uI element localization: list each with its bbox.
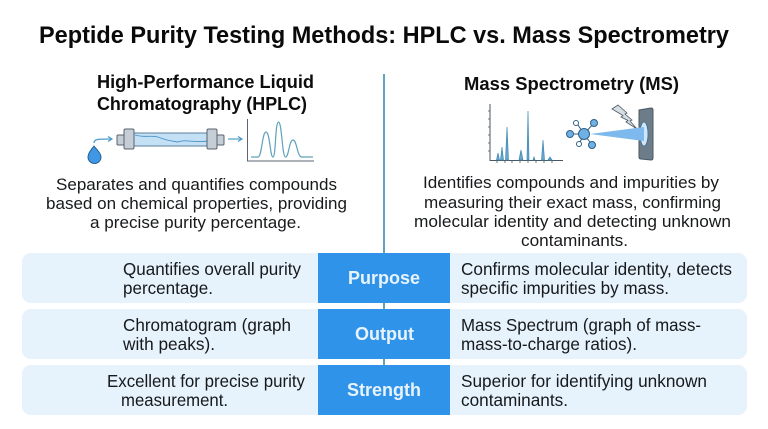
icon: molecule <box>566 120 598 148</box>
text: HPLC description: a precise purity percentage. <box>90 214 301 232</box>
icon: HPLC column <box>117 129 224 149</box>
text: Strength MS: Superior for identifying unknown <box>461 371 707 391</box>
row: Output <box>22 309 747 359</box>
text: Strength MS: contaminants. <box>461 390 568 410</box>
panel: MS <box>414 74 731 250</box>
text: Strength MS <box>461 371 707 410</box>
heading: HPLC <box>97 72 314 114</box>
text: HPLC description: Separates and quantifies compounds <box>56 176 337 194</box>
icon: lightning bolt <box>612 105 637 129</box>
label: Strength <box>318 365 450 415</box>
text: MS description: Identifies compounds and impurities by <box>423 174 720 192</box>
chart: mass spectrum <box>488 104 563 163</box>
heading: HPLC: Chromatography (HPLC) <box>97 94 307 114</box>
text: Output HPLC <box>122 315 291 354</box>
label: Output <box>318 309 450 359</box>
heading: HPLC: High-Performance Liquid <box>97 72 314 92</box>
title: Peptide Purity Testing Methods: HPLC vs. Mass Spectrometry <box>39 22 730 49</box>
text: Output HPLC: with peaks). <box>122 334 215 354</box>
label: Strength: Strength <box>347 379 421 400</box>
icon: water drop <box>88 146 101 164</box>
row: Purpose <box>22 253 747 303</box>
text: Output MS: Mass Spectrum (graph of mass- <box>461 315 701 335</box>
label: Purpose: Purpose <box>348 267 420 288</box>
text: Strength HPLC: measurement. <box>121 390 228 410</box>
text: Purpose HPLC: percentage. <box>123 278 213 298</box>
text: MS description: molecular identity and detecting unknown <box>414 213 731 231</box>
label: Purpose <box>318 253 450 303</box>
arrow: column to chromatogram <box>228 136 242 142</box>
row: Strength <box>22 365 747 415</box>
chart: chromatogram <box>248 119 314 161</box>
text: MS description: measuring their exact mass, confirming <box>424 194 721 212</box>
text: Purpose HPLC: Quantifies overall purity <box>123 259 301 279</box>
text: Output MS: mass-to-charge ratios). <box>461 334 637 354</box>
text: Output MS <box>461 315 701 354</box>
heading: MS: Mass Spectrometry (MS) <box>464 74 679 94</box>
text: MS description <box>414 174 731 250</box>
text: Purpose MS: specific impurities by mass. <box>461 278 669 298</box>
center divider line <box>383 74 385 404</box>
text: Purpose MS <box>461 259 732 298</box>
text: Purpose MS: Confirms molecular identity, detects <box>461 259 732 279</box>
text: MS description: contaminants. <box>521 232 628 250</box>
text: Purpose HPLC <box>123 259 301 298</box>
text: HPLC description <box>46 176 347 232</box>
icon: detector plate <box>639 108 653 160</box>
icon: ion beam <box>590 127 644 141</box>
text: Strength HPLC: Excellent for precise purity <box>107 371 305 391</box>
text: Output HPLC: Chromatogram (graph <box>123 315 291 335</box>
label: Output: Output <box>355 323 414 344</box>
text: Strength HPLC <box>107 371 305 410</box>
arrow: drop to column <box>94 136 112 143</box>
panel: HPLC <box>46 72 347 232</box>
text: HPLC description: based on chemical properties, providing <box>46 195 347 213</box>
